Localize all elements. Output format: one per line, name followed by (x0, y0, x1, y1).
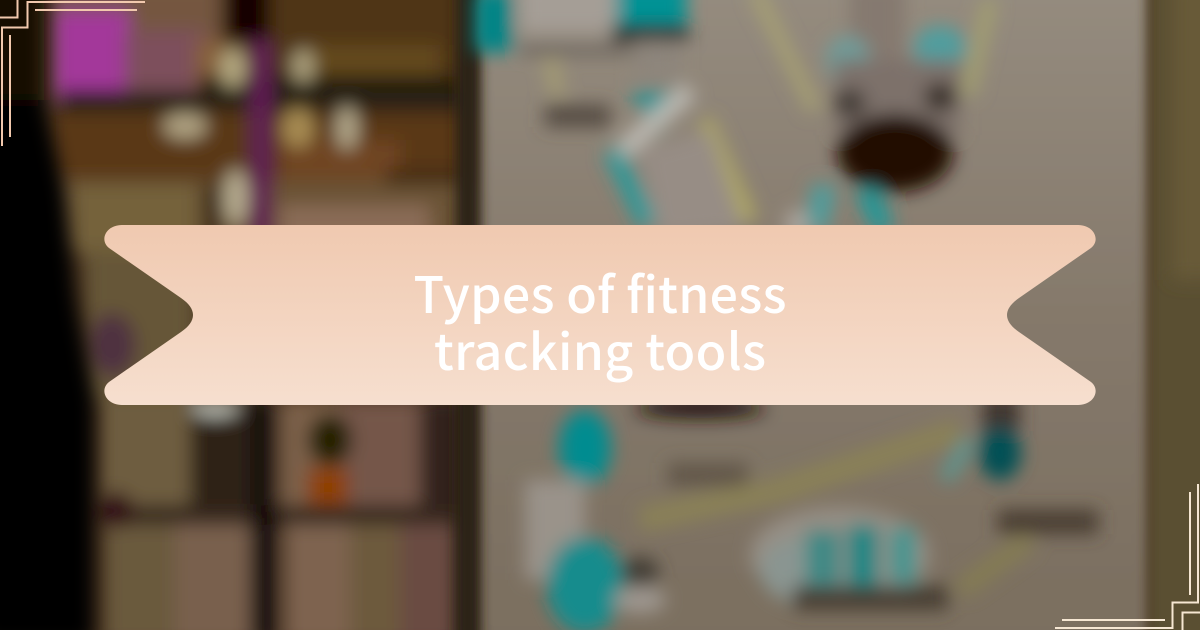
shelving unit (50, 0, 480, 630)
poster artwork: blurred icons (474, 0, 1098, 630)
poster wall (456, 0, 1200, 630)
title: Types of fitness (414, 256, 786, 328)
ribbon shape (104, 225, 1096, 405)
title: tracking tools (434, 313, 766, 385)
corner ornament: bottom right (1055, 484, 1200, 630)
corner ornament: top left (0, 0, 145, 146)
dark foreground silhouette at left (0, 0, 94, 630)
